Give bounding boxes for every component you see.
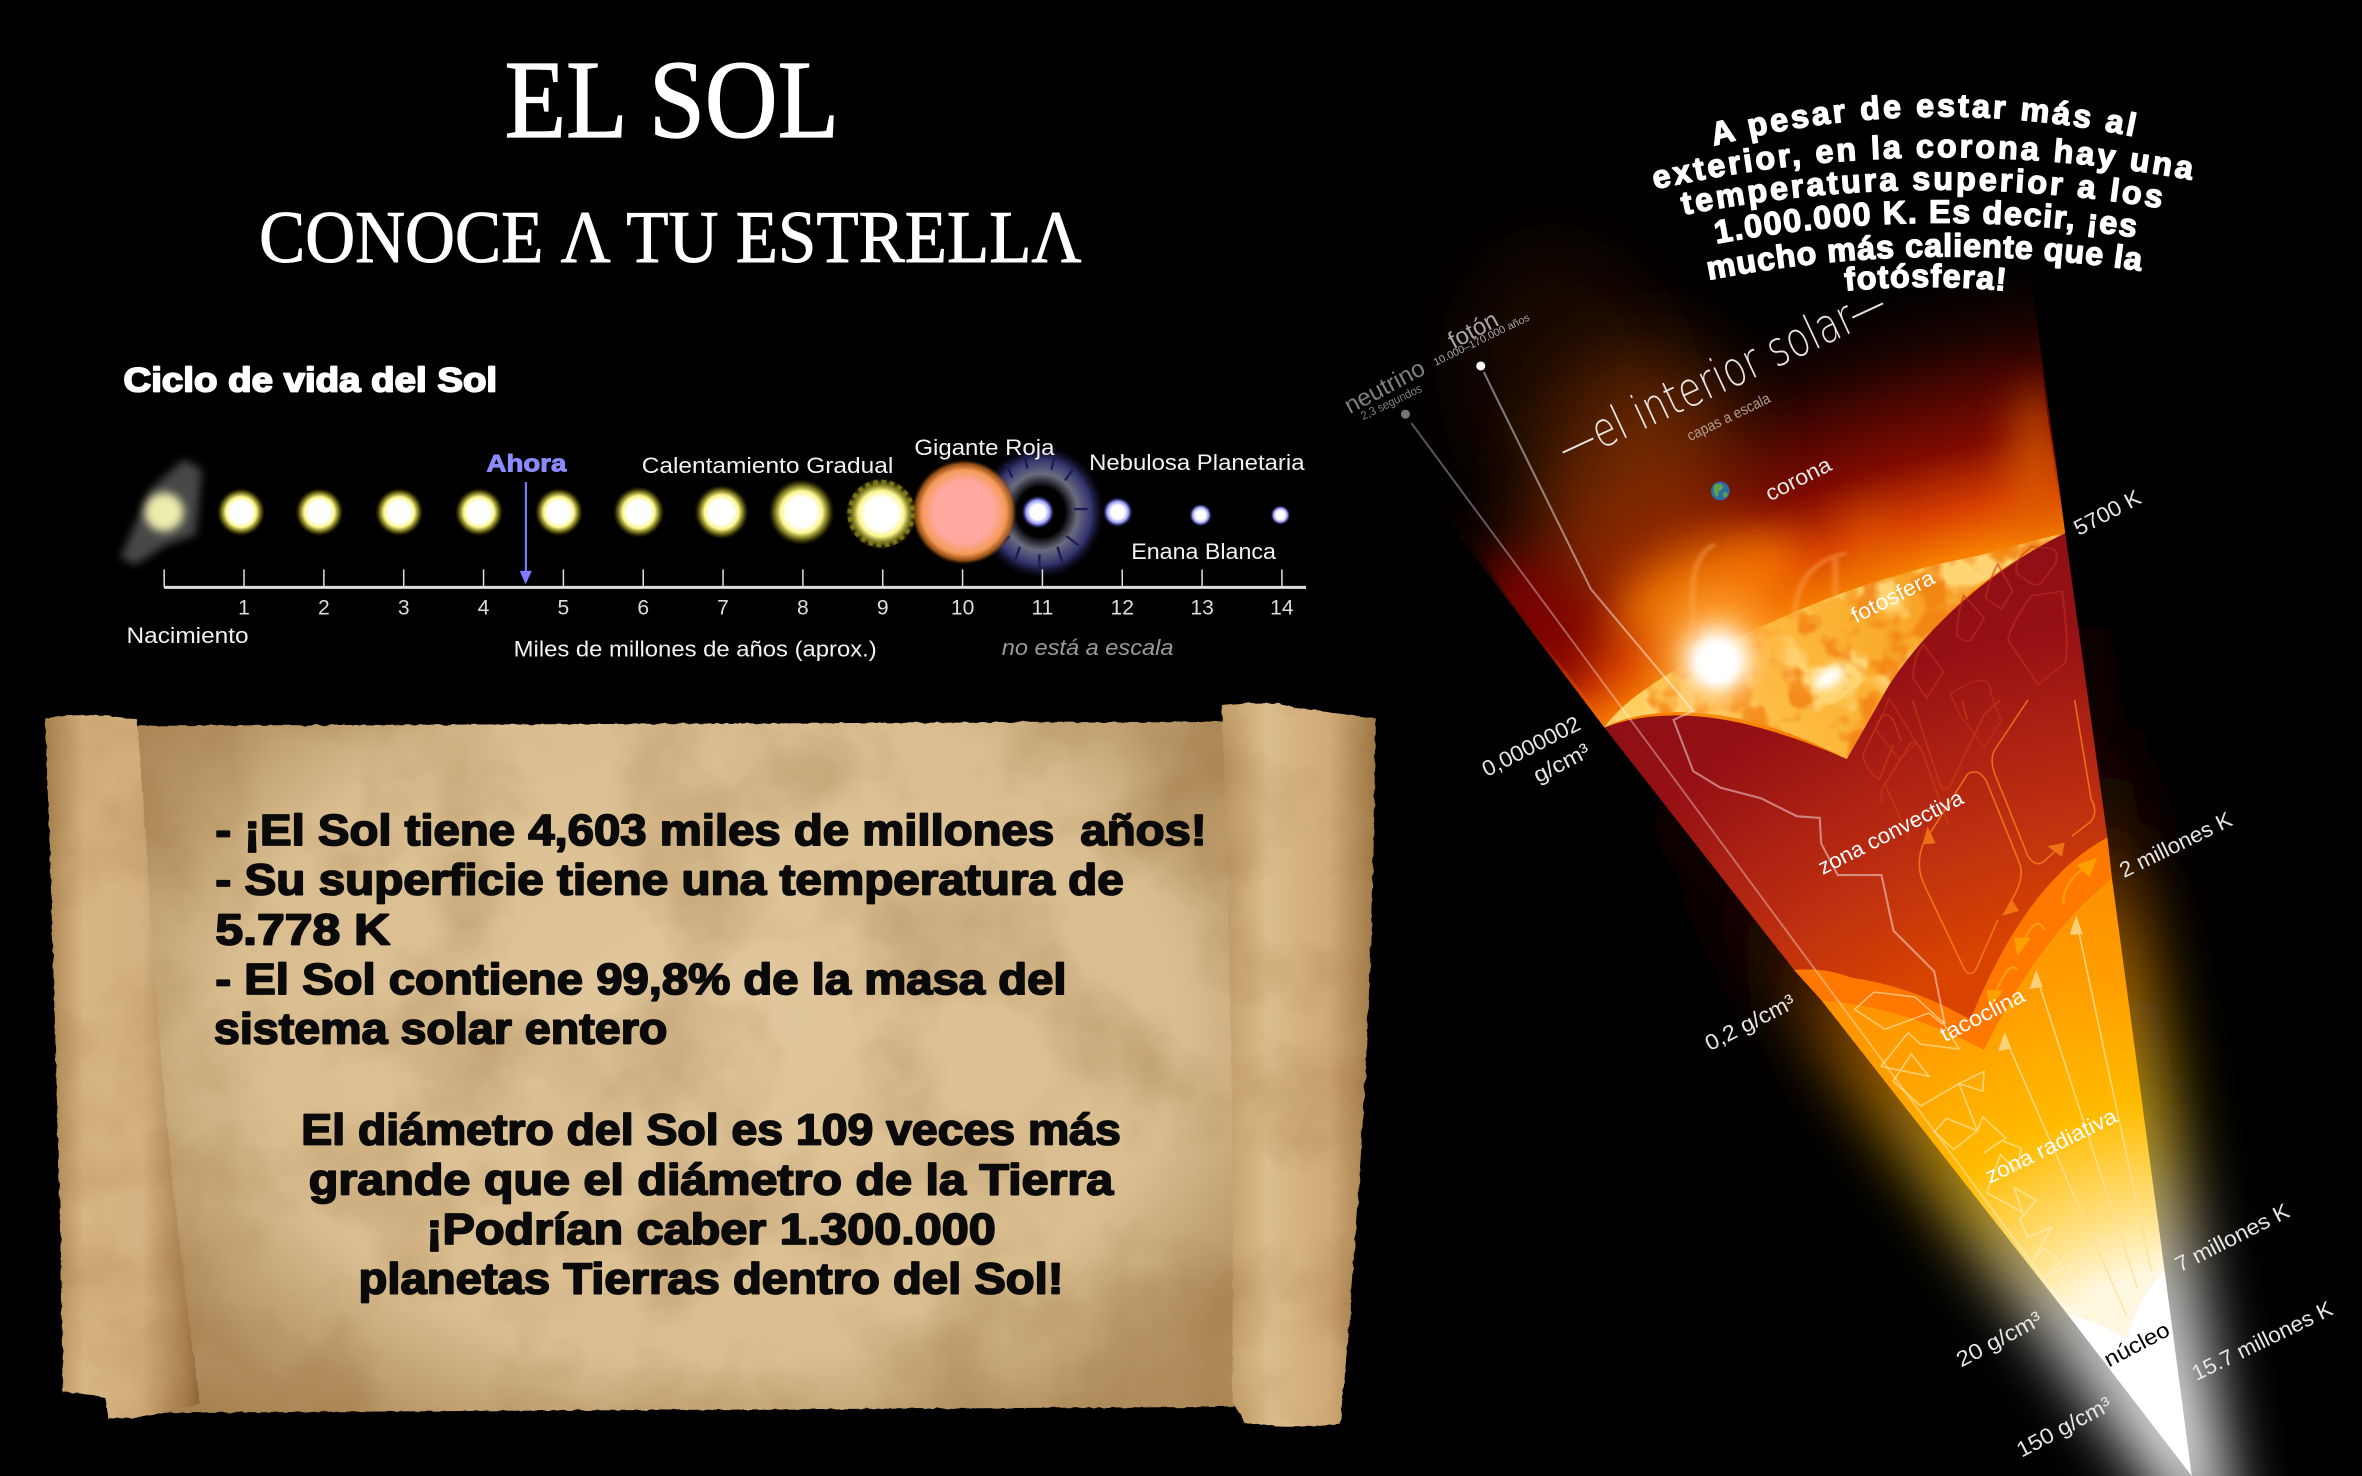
label: calentamiento gradual: Calentamiento Gradual (642, 453, 893, 478)
axis numbers: 8 (797, 596, 809, 619)
icon: star sequence (217, 477, 917, 550)
callout: corona arqueada: 1.000.000 K. Es decir, ¡es (1714, 200, 2136, 244)
label: fotosfera: fotosfera (1847, 564, 1939, 628)
icon: nacimiento nebula (121, 459, 202, 565)
label: 150 g/cm3: 150 g/cm³ (2012, 1391, 2116, 1462)
neutrino path (1401, 410, 2067, 1310)
axis numbers (238, 596, 1294, 619)
icon: red giant (911, 459, 1017, 565)
label: 15.7 millones K: 15.7 millones K (2188, 1296, 2337, 1386)
label: nacimiento: Nacimiento (127, 623, 249, 648)
icon: planetary nebula (978, 446, 1104, 578)
radiation rays (1999, 918, 2152, 1316)
convection cells (1863, 700, 2095, 974)
label: densidad superficie: 0,0000002 (1478, 711, 1584, 782)
label: fotón: fotón (1444, 306, 1503, 355)
zona convectiva (1604, 533, 2107, 1020)
label: zona radiativa: zona radiativa (1981, 1103, 2122, 1188)
callout: corona arqueada: exterior, en la corona hay una (1653, 134, 2193, 188)
callout: corona arqueada (1653, 94, 2193, 292)
label: 5700 K: 5700 K (2069, 484, 2145, 541)
callout: corona arqueada: A pesar de estar más al (1714, 94, 2137, 146)
callout: corona arqueada: mucho más caliente que la (1707, 232, 2142, 280)
label: corona: corona (1761, 451, 1836, 506)
parchment sheet (105, 721, 1250, 1413)
axis numbers: 4 (478, 596, 490, 619)
label: capas a escala: capas a escala (1684, 390, 1774, 445)
label: miles de millones: Miles de millones de años (aprox.) (514, 637, 877, 662)
núcleo (2067, 1271, 2192, 1476)
label: neutrino: neutrino (1340, 355, 1430, 419)
text block: datos: - El Sol contiene 99,8% de la masa del (215, 955, 1067, 1004)
label: densidad superficie: g/cm³ (1529, 738, 1594, 788)
photosphere (1604, 533, 2065, 759)
axis numbers: 6 (637, 596, 649, 619)
chart: el interior solar (1340, 219, 2337, 1476)
label: neutrino: 2,3 segundos (1358, 381, 1424, 423)
label: 0,2 g/cm3: 0,2 g/cm³ (1701, 989, 1799, 1056)
corona (1458, 290, 2066, 759)
right scroll roll (1222, 703, 1375, 1427)
left scroll roll (45, 715, 200, 1419)
text block: diámetro: El diámetro del Sol es 109 veces más (301, 1106, 1121, 1155)
axis numbers: 1 (238, 596, 250, 619)
arrow: ahora (520, 482, 532, 584)
text block: diámetro: planetas Tierras dentro del Sol! (359, 1255, 1064, 1304)
axis numbers: 7 (717, 596, 729, 619)
zona radiativa (1821, 878, 2165, 1339)
text block: datos: 5.778 K (215, 905, 391, 954)
label: núcleo: núcleo (2100, 1317, 2174, 1372)
label: 7 millones K: 7 millones K (2171, 1198, 2294, 1277)
solar flare (1660, 544, 1848, 708)
tacoclina (1794, 837, 2112, 1050)
icon: white dwarfs (1021, 496, 1290, 529)
axis numbers: 3 (398, 596, 410, 619)
callout: corona arqueada: fotósfera! (1844, 262, 2005, 292)
outer glow (1431, 219, 2192, 1476)
text block: diámetro: grande que el diámetro de la Tierra (309, 1155, 1114, 1204)
heading: el interior solar: —el interior solar— (1548, 275, 1895, 476)
photon path (1476, 361, 2097, 1319)
text block: datos: - ¡El Sol tiene 4,603 miles de millones años! (215, 806, 1207, 855)
axis numbers: 10 (951, 596, 974, 619)
label: gigante roja: Gigante Roja (914, 435, 1055, 460)
callout: corona arqueada: temperatura superior a los (1680, 168, 2162, 215)
label: ahora: Ahora (487, 450, 567, 477)
label: 2 millones K: 2 millones K (2115, 806, 2236, 883)
tachocline flow arrows (1988, 859, 2095, 1006)
label: tacoclina: tacoclina (1936, 982, 2030, 1047)
label: 20 g/cm3: 20 g/cm³ (1952, 1306, 2046, 1372)
axis numbers: 11 (1031, 596, 1053, 619)
axis numbers: 2 (318, 596, 330, 619)
panel: pergamino (45, 703, 1375, 1427)
label: nebulosa planetaria: Nebulosa Planetaria (1089, 450, 1305, 475)
nebula filaments (1000, 455, 1088, 569)
text block: diámetro: ¡Podrían caber 1.300.000 (426, 1205, 996, 1254)
text block: datos: - Su superficie tiene una temperatura de (215, 856, 1124, 905)
text block: diámetro (301, 1106, 1121, 1304)
axis numbers: 12 (1111, 596, 1134, 619)
text block: datos: sistema solar entero (214, 1005, 667, 1054)
timeline axis (164, 569, 1306, 587)
axis numbers: 9 (877, 596, 889, 619)
text block: datos (214, 806, 1207, 1054)
axis numbers: 5 (558, 596, 569, 619)
panel: ciclo de vida del Sol (121, 362, 1306, 662)
title: EL SOL (505, 39, 839, 162)
label: enana blanca: Enana Blanca (1131, 539, 1276, 564)
icon: earth (1711, 482, 1730, 500)
label: no está a escala: no está a escala (1002, 635, 1173, 660)
subtitle: CONOCE Λ TU ESTRELLΛ (259, 196, 1082, 278)
axis numbers: 14 (1270, 596, 1294, 619)
label: fotón: 10.000–170.000 años (1432, 312, 1532, 369)
label: zona convectiva: zona convectiva (1814, 784, 1968, 880)
axis numbers: 13 (1190, 596, 1214, 619)
heading: ciclo de vida: Ciclo de vida del Sol (124, 362, 497, 400)
